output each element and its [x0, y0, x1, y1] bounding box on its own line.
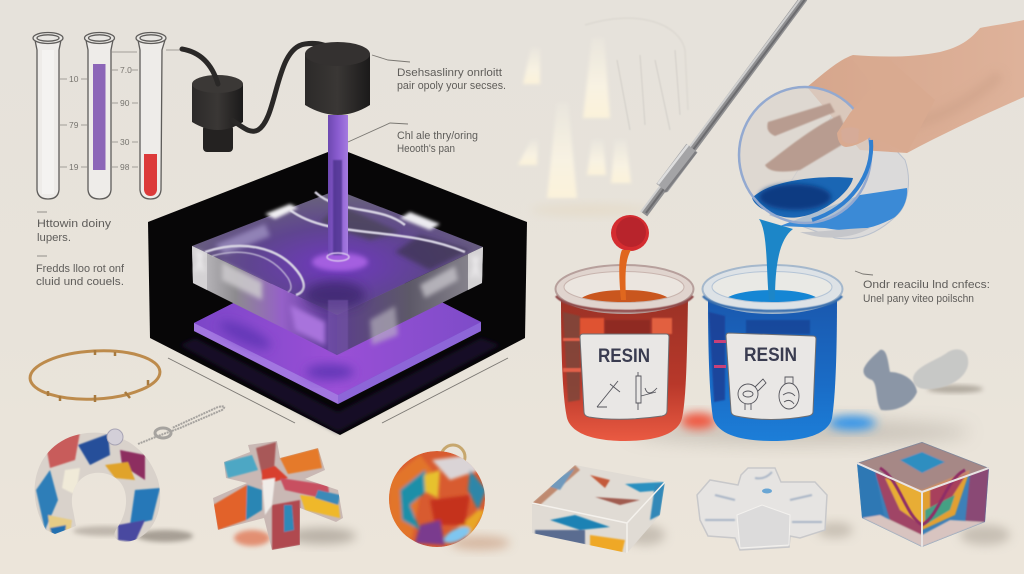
- blue resin jar: [702, 265, 842, 441]
- label: RESIN: [598, 346, 650, 367]
- callout text: pouring: Unel pany viteo poilschn: [863, 293, 974, 305]
- left notes: Fredds lloo rot onf: [36, 263, 125, 275]
- left notes: Httowin doiny: [37, 218, 112, 230]
- liquid: [780, 188, 907, 230]
- tube 3: [136, 32, 166, 199]
- tube scale numbers: 30: [120, 137, 130, 147]
- tube scale numbers: 90: [120, 98, 130, 108]
- stones: [863, 349, 983, 410]
- left notes: [36, 212, 125, 288]
- bracelet: [29, 348, 161, 402]
- callout text: beam: Heooth's pan: [397, 143, 455, 155]
- small print head: [192, 75, 243, 152]
- callout text: print head: Dsehsaslinry onrloitt: [397, 67, 502, 79]
- resin cube: [855, 440, 1010, 550]
- base shadow: [180, 338, 500, 432]
- light beam: [327, 115, 349, 261]
- blue stream: [759, 219, 793, 300]
- label: [726, 333, 816, 420]
- callout text: pouring: Ondr reacilu lnd cnfecs:: [863, 279, 990, 291]
- steel spoon rod: [611, 0, 806, 251]
- table shadows and glows: [630, 413, 970, 444]
- label: [580, 334, 669, 419]
- large print head: [305, 42, 370, 115]
- silver chain: [138, 406, 224, 444]
- tube scale numbers: 98: [120, 162, 130, 172]
- tube 1: [33, 32, 63, 199]
- cup opening: [739, 87, 871, 223]
- left notes: lupers.: [37, 232, 71, 244]
- red resin jar: [556, 250, 694, 441]
- callout lines: [168, 55, 873, 423]
- purple plate: [194, 250, 481, 404]
- faded background glassware: [518, 18, 688, 216]
- inner blue liquid: [752, 177, 853, 218]
- label: RESIN: [744, 345, 797, 366]
- test tubes: [33, 32, 181, 199]
- tube scale marks: [60, 50, 181, 167]
- tube scale numbers: 10: [69, 74, 79, 84]
- thumb: [837, 60, 935, 153]
- black enclosure: [148, 152, 527, 435]
- tube scale numbers: [69, 65, 132, 172]
- hand: [807, 20, 1024, 153]
- 3D printer diagram: [148, 42, 527, 435]
- fingers through cup: [765, 103, 850, 172]
- resin cross charm: [210, 438, 356, 553]
- cables: [182, 43, 334, 131]
- hand and cup pouring blue resin: [739, 20, 1024, 300]
- callout text: pouring: [863, 279, 990, 305]
- callout text: print head: [397, 67, 506, 92]
- resin ring pendant: [30, 425, 193, 545]
- red spoon: [611, 215, 649, 251]
- resin rectangular block: [530, 462, 670, 556]
- left notes: cluid und couels.: [36, 276, 124, 288]
- callout text: print head: pair opoly your secses.: [397, 80, 506, 92]
- cup rim: [739, 87, 871, 223]
- callout text: beam: Chl ale thry/oring: [397, 130, 478, 142]
- callout text: beam: [397, 130, 478, 155]
- tube 2: [84, 32, 114, 199]
- tube scale numbers: 19: [69, 162, 79, 172]
- clear resin cross: [697, 468, 853, 550]
- resin sphere pendant: [388, 445, 510, 550]
- tube scale numbers: 7.0: [120, 65, 132, 75]
- cup back: [770, 95, 908, 239]
- tube scale numbers: 79: [69, 120, 79, 130]
- glass slab: [192, 190, 483, 355]
